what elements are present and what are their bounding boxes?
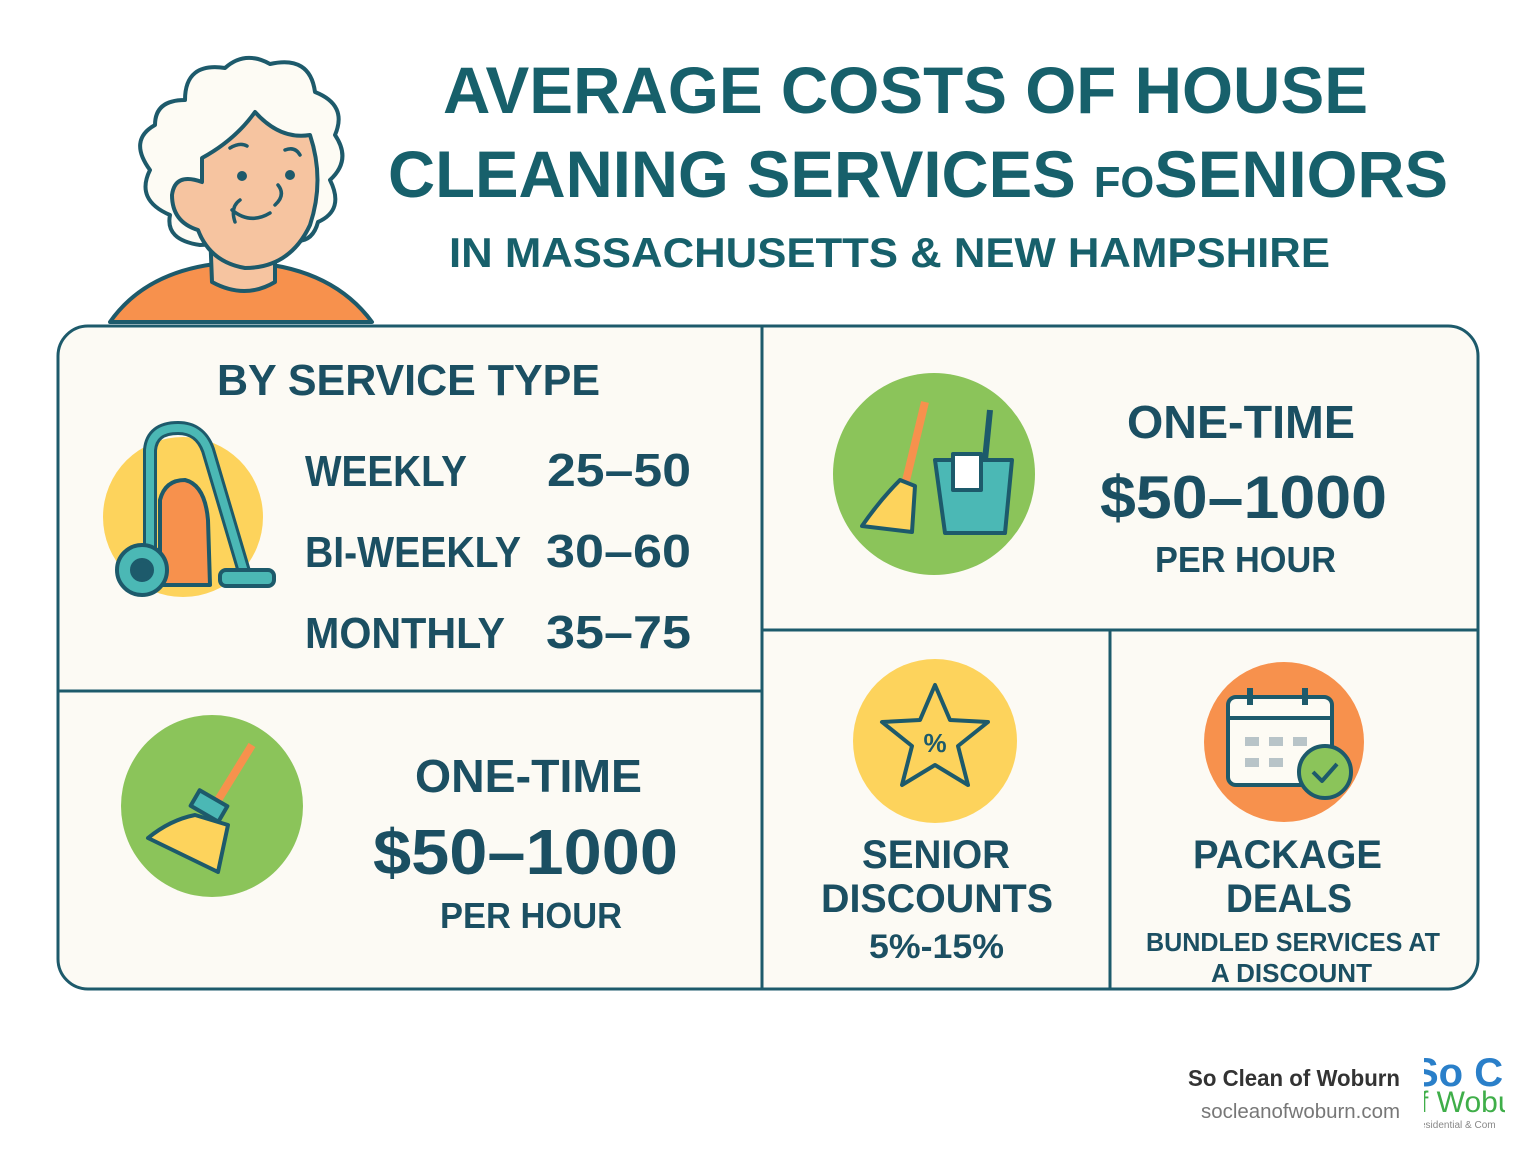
panel: by service type: BI-WEEKLY: [305, 528, 521, 577]
panel: package deals: DEALS: [1226, 877, 1352, 921]
logo: esidential & Com: [1420, 1120, 1496, 1131]
footer: brand: [1188, 1058, 1505, 1128]
title: CLEANING SERVICES FOSENIORS: [388, 137, 1448, 211]
icon: star percent: [853, 659, 1017, 823]
icon: star percent: %: [923, 728, 947, 758]
title: IN MASSACHUSETTS & NEW HAMPSHIRE: [449, 229, 1330, 276]
footer: brand: So Clean of Woburn: [1188, 1065, 1400, 1091]
panel: by service type: BY SERVICE TYPE: [217, 356, 600, 405]
icon: broom: [121, 715, 303, 897]
panel: one-time bottom left: [121, 715, 678, 936]
icon: broom and bucket: [833, 373, 1035, 575]
panel: senior discounts: SENIOR: [862, 833, 1010, 877]
panel: by service type: MONTHLY: [305, 609, 505, 658]
panel: one-time bottom left: $50–1000: [373, 816, 678, 888]
panel: package deals: BUNDLED SERVICES AT: [1146, 927, 1440, 957]
title: AVERAGE COSTS OF HOUSE: [443, 53, 1368, 127]
panel: senior discounts: DISCOUNTS: [821, 877, 1053, 921]
panel: by service type: 25–50: [547, 444, 691, 496]
logo: So Cle: [1412, 1051, 1536, 1095]
icon: calendar check: [1204, 662, 1364, 822]
panel: senior discounts: 5%-15%: [869, 928, 1004, 966]
main panel frame: [58, 326, 1478, 989]
panel: by service type: [103, 356, 691, 658]
panel: package deals: A DISCOUNT: [1211, 958, 1372, 988]
panel: one-time top right: [833, 373, 1387, 580]
panel: one-time top right: PER HOUR: [1155, 539, 1336, 580]
panel: by service type: WEEKLY: [305, 447, 467, 496]
panel: by service type: 35–75: [546, 606, 691, 658]
panel: one-time top right: ONE-TIME: [1127, 396, 1355, 448]
title: [388, 53, 1448, 276]
panel: one-time bottom left: PER HOUR: [440, 895, 622, 936]
icon: vacuum: [103, 428, 274, 597]
panel: package deals: PACKAGE: [1193, 833, 1382, 877]
logo: f Wobu: [1420, 1086, 1514, 1119]
panel: one-time top right: $50–1000: [1100, 464, 1387, 531]
illustration: senior woman: [110, 58, 372, 322]
panel: one-time bottom left: ONE-TIME: [415, 750, 642, 802]
footer: brand: socleanofwoburn.com: [1201, 1101, 1400, 1123]
logo: [1424, 1058, 1505, 1128]
panel: senior discounts: [821, 659, 1053, 966]
panel: package deals: [1146, 662, 1440, 988]
panel: by service type: 30–60: [546, 525, 691, 577]
